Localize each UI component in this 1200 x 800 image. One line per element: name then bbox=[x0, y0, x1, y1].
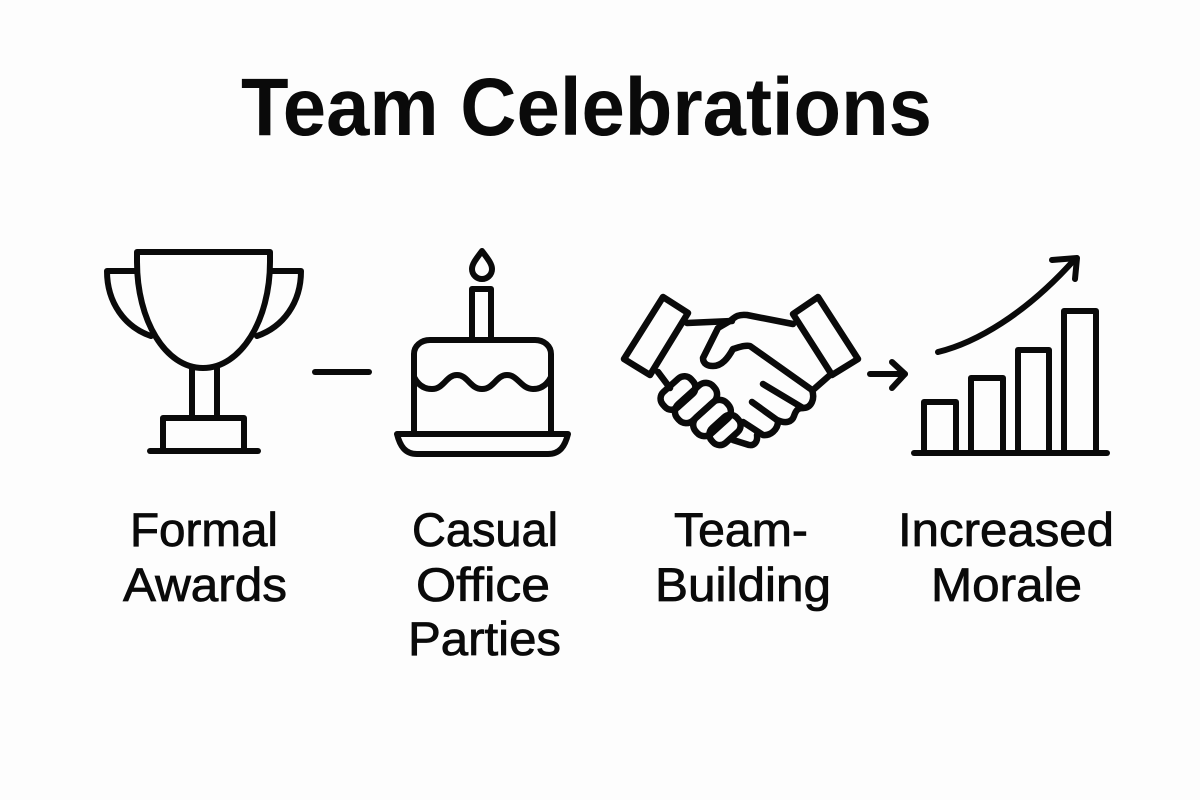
icon: handshake bbox=[624, 297, 858, 449]
label: Increased Morale bbox=[898, 503, 1114, 611]
label: Casual Office Parties bbox=[408, 503, 561, 665]
label: Increased Morale: Morale bbox=[931, 558, 1082, 611]
connector: small arrow bbox=[870, 362, 905, 388]
icon: rising bar chart bbox=[914, 258, 1107, 453]
title: Team Celebrations bbox=[241, 62, 932, 153]
label: Formal Awards: Formal bbox=[130, 503, 278, 556]
label: Casual Office Parties: Office bbox=[416, 558, 550, 611]
icon: trophy bbox=[107, 252, 301, 451]
label: Casual Office Parties: Parties bbox=[408, 612, 561, 665]
label: Team-Building bbox=[655, 503, 831, 611]
label: Formal Awards: Awards bbox=[123, 558, 287, 611]
label: Casual Office Parties: Casual bbox=[412, 503, 558, 556]
connector: dash bbox=[315, 369, 369, 375]
label: Team-Building: Team- bbox=[674, 503, 808, 556]
label: Team-Building: Building bbox=[655, 558, 831, 611]
icon: birthday cake bbox=[397, 251, 568, 454]
label: Increased Morale: Increased bbox=[898, 503, 1114, 556]
label: Formal Awards bbox=[123, 503, 287, 611]
